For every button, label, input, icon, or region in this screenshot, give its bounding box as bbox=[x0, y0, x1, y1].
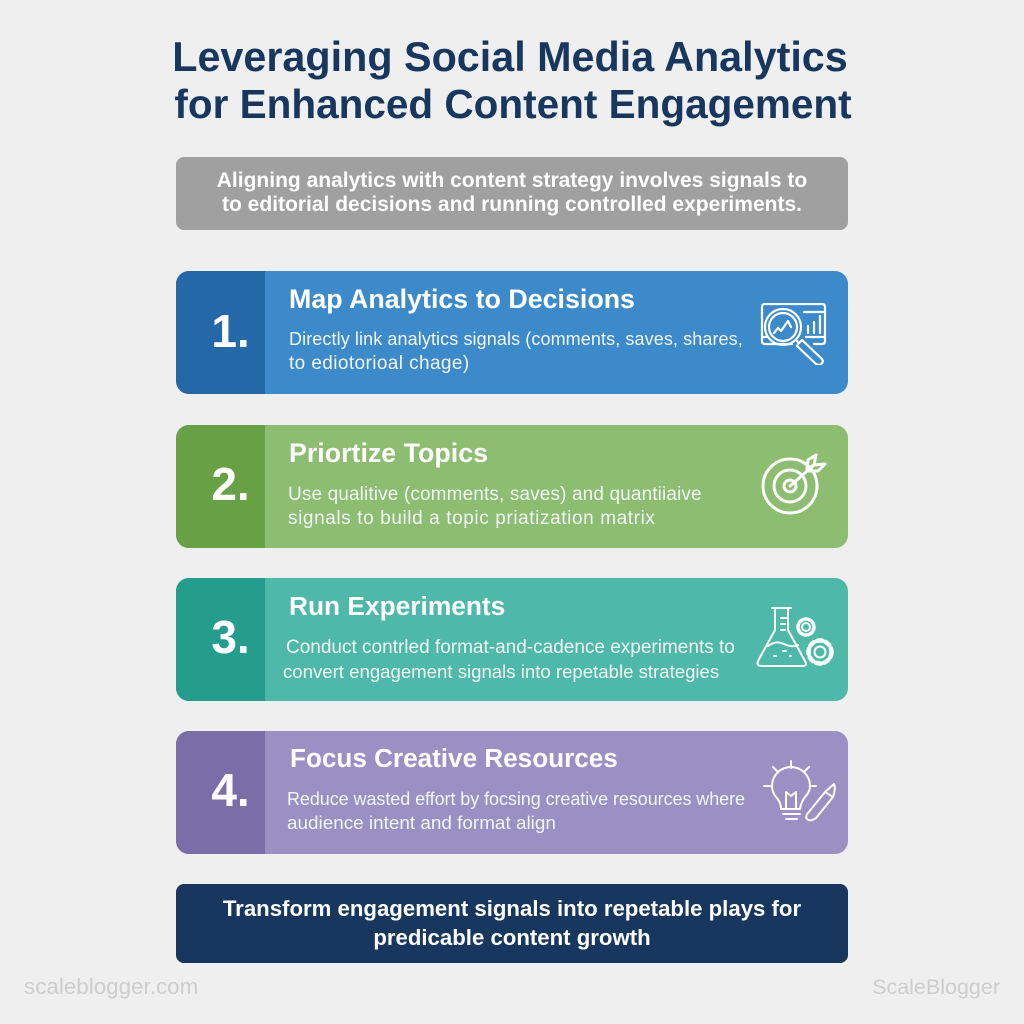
watermark left: scaleblogger.com bbox=[24, 974, 198, 999]
text 2 bbox=[288, 484, 702, 528]
text 2: Use qualitive (comments, saves) and quantiiaive bbox=[288, 484, 702, 505]
closing banner: predicable content growth bbox=[373, 925, 651, 950]
number 4: 4. bbox=[211, 764, 250, 816]
intro banner bbox=[176, 157, 848, 230]
heading 1: Map Analytics to Decisions bbox=[289, 284, 635, 314]
heading 2: Priortize Topics bbox=[289, 438, 488, 468]
panel: step 2 bbox=[176, 425, 848, 548]
panel: step 4 bbox=[176, 731, 848, 854]
number 3 bbox=[176, 578, 265, 701]
text 4 bbox=[287, 789, 745, 834]
heading 3: Run Experiments bbox=[289, 591, 505, 621]
heading 4: Focus Creative Resources bbox=[290, 743, 618, 773]
number 3: 3. bbox=[211, 611, 250, 663]
text 3: convert engagement signals into repetable strategies bbox=[283, 660, 719, 682]
intro banner: to editorial decisions and running controlled experiments. bbox=[222, 192, 802, 216]
number 4 bbox=[176, 731, 265, 854]
number 1 bbox=[176, 271, 265, 394]
title bbox=[172, 34, 852, 127]
text 1: to ediotorioal chage) bbox=[289, 352, 470, 374]
text 3: Conduct contrled format-and-cadence experiments to bbox=[286, 637, 735, 658]
panel: step 1 bbox=[176, 271, 848, 394]
text 3 bbox=[283, 637, 735, 682]
icon: flask and gears bbox=[756, 607, 834, 667]
intro banner: Aligning analytics with content strategy involves signals to bbox=[217, 169, 807, 192]
number 2 bbox=[176, 425, 265, 548]
text 4: audience intent and format align bbox=[287, 812, 556, 834]
panel: step 3 bbox=[176, 578, 848, 701]
icon: lightbulb and brush bbox=[763, 760, 836, 822]
text 1 bbox=[289, 329, 743, 374]
text 4: Reduce wasted effort by focsing creative resources where bbox=[287, 789, 745, 809]
watermark right: ScaleBlogger bbox=[872, 975, 1000, 999]
title: for Enhanced Content Engagement bbox=[174, 81, 852, 127]
icon: analytics magnifier bbox=[760, 303, 826, 365]
icon: target bbox=[762, 454, 826, 514]
text 2: signals to build a topic priatization matrix bbox=[288, 508, 656, 528]
number 1: 1. bbox=[211, 305, 250, 357]
number 2: 2. bbox=[211, 458, 250, 510]
text 1: Directly link analytics signals (comments, saves, shares, bbox=[289, 329, 743, 349]
closing banner bbox=[178, 884, 846, 963]
closing banner: Transform engagement signals into repetable plays for bbox=[223, 896, 801, 921]
title: Leveraging Social Media Analytics bbox=[172, 34, 848, 80]
